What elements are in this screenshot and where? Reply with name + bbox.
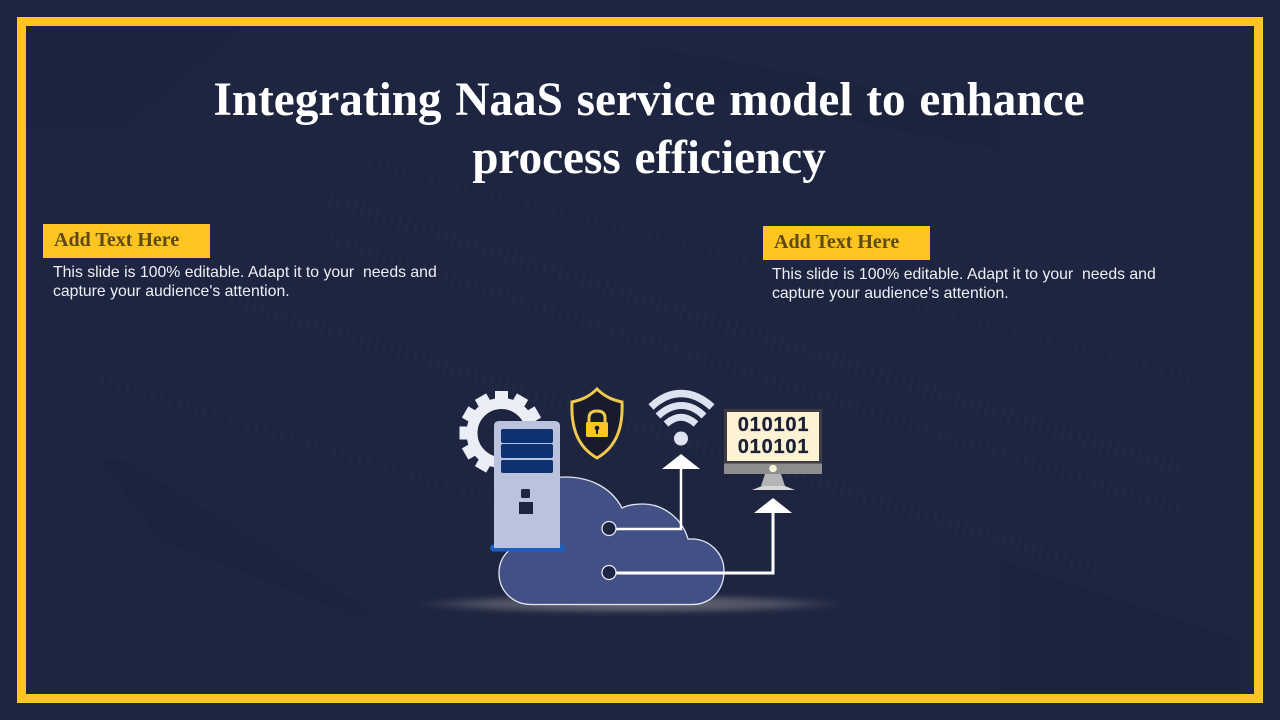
icon: gear: [460, 391, 544, 475]
connector lines: [616, 466, 773, 573]
title: [213, 74, 1085, 184]
icon: shield with padlock: [572, 389, 622, 458]
right label: add text here: Add Text Here: [774, 231, 899, 253]
icon: monitor with binary code: [724, 409, 822, 490]
icon: cloud: [499, 477, 724, 604]
connector nodes: [602, 522, 616, 580]
arrowheads: [662, 454, 792, 513]
right body text: This slide is 100% editable. Adapt it to your needs and: [772, 266, 1156, 283]
icon: monitor with binary code: 010101: [738, 414, 809, 436]
left body text: [53, 264, 437, 300]
right label: add text here: [763, 226, 930, 260]
left label: add text here: [43, 224, 210, 258]
title: process efficiency: [472, 132, 826, 184]
ground shadow: [412, 594, 848, 614]
left label: add text here: Add Text Here: [54, 229, 179, 251]
left body text: capture your audience's attention.: [53, 283, 290, 300]
title: Integrating NaaS service model to enhance: [213, 74, 1085, 126]
icon: wifi signal: [651, 394, 712, 446]
left body text: This slide is 100% editable. Adapt it to your needs and: [53, 264, 437, 281]
right body text: capture your audience's attention.: [772, 285, 1009, 302]
icon: server tower: [490, 421, 565, 552]
icon: monitor with binary code: 010101: [738, 436, 809, 458]
right body text: [772, 266, 1156, 302]
